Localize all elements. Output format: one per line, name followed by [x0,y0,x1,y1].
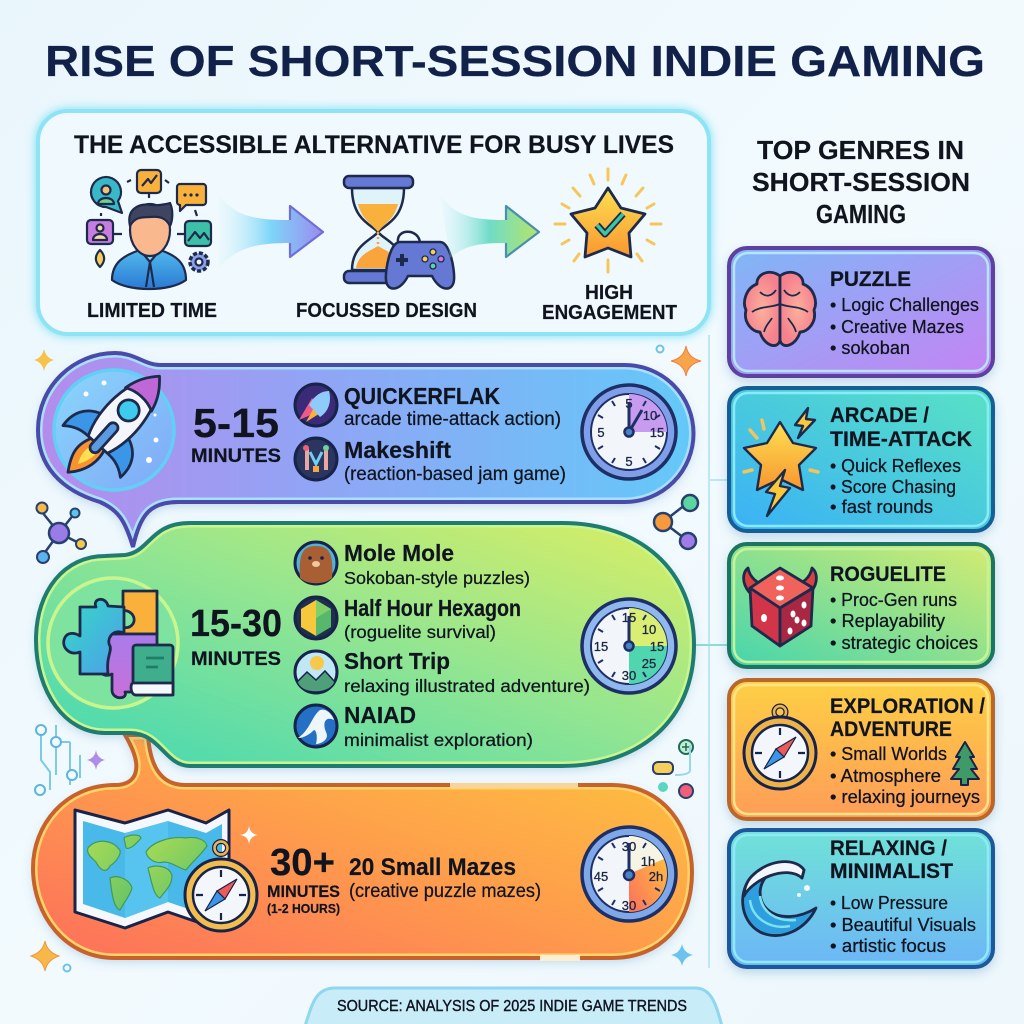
label: focussed design: FOCUSSED DESIGN [296,300,477,322]
icon: horned dice [744,568,816,646]
genre bullets: • Creative Mazes [830,317,964,337]
genre card: relaxing [729,830,993,967]
label: high engagement: ENGAGEMENT [542,302,677,324]
icon: puzzle and book [48,578,178,708]
game: Makeshift [344,437,566,485]
title: RISE OF SHORT-SESSION INDIE GAMING [45,37,985,86]
icon: compass [185,842,257,931]
game: Quickerflak: QUICKERFLAK [344,383,500,409]
icon: brain [744,272,816,346]
genres heading: SHORT-SESSION [752,167,970,197]
genre bullets: • Score Chasing [830,477,956,497]
game: Mole Mole [344,540,530,588]
genre heading [830,837,953,883]
panel heading: THE ACCESSIBLE ALTERNATIVE FOR BUSY LIVES [74,131,674,159]
genre heading [830,404,972,451]
duration: 30+ minutes: MINUTES [267,882,340,901]
panel: 5-15 minutes [38,350,694,547]
genre bullets: • fast rounds [830,497,933,517]
icon: pine tree [951,742,979,785]
genre heading: PUZZLE [830,268,911,291]
clock: 5-15 minutes: 5 [597,425,605,440]
icon: busy person [87,170,211,289]
genre heading: ARCADE / [830,404,929,427]
clock: 15-30 minutes: 25 [642,656,656,671]
genre bullets: • Small Worlds [830,744,947,764]
genre card: puzzle [729,248,993,376]
clock: 30+ minutes: 30 [622,839,636,854]
genre heading: MINIMALIST [830,860,953,883]
game: Short Trip [344,648,590,696]
icon: Quickerflak [295,384,337,426]
genre bullets: • Proc-Gen runs [830,590,957,610]
genre bullets: • artistic focus [830,936,946,956]
icon: Half Hour Hexagon [295,597,337,639]
clock: 30+ minutes: 1h [641,854,655,869]
genre bullets: • Logic Challenges [830,295,979,315]
clock: 15-30 minutes: 15 [650,639,664,654]
genre heading: EXPLORATION / [830,695,985,718]
panel: the accessible alternative [38,111,709,334]
genre heading [830,695,985,741]
genre heading: RELAXING / [830,837,947,860]
icon: star and lightning [744,408,818,516]
panel: 15-30 minutes [36,523,694,766]
duration: 15-30 minutes: 15-30 [190,603,282,645]
duration: 15-30 minutes [190,603,282,670]
clock: 15-30 minutes: 15 [594,639,608,654]
genre bullets: • Beautiful Visuals [830,915,976,935]
game: Makeshift: (reaction-based jam game) [344,464,566,485]
source tab [305,988,722,1024]
game: Quickerflak [344,383,561,430]
genre bullets [830,456,961,517]
genres heading: TOP GENRES IN [757,135,964,165]
duration: 30+ minutes: 30+ [270,842,335,884]
genre heading: TIME-ATTACK [830,428,972,451]
sparkle [240,826,258,844]
game: 20 Small Mazes [349,854,541,902]
genres heading [752,135,970,229]
clock: 5-15 minutes: 5 [625,454,633,469]
genre bullets: • strategic choices [830,633,978,653]
genre bullets [830,295,979,358]
genre heading: ADVENTURE [830,718,952,741]
genres heading: GAMING [816,199,906,229]
genre bullets: • relaxing journeys [830,787,980,807]
icon: compass [744,706,816,789]
duration: 15-30 minutes: MINUTES [191,649,281,670]
decorative sparkles and networks [31,346,701,972]
clock: 15-30 minutes: 30 [622,668,636,683]
game: NAIAD [344,702,533,750]
icon: star with check [555,169,661,272]
label: limited time: LIMITED TIME [87,300,217,322]
genre bullets [830,590,978,653]
game: NAIAD: minimalist exploration) [344,730,533,750]
icon: Mole Mole [295,542,337,584]
genre card: roguelite [729,544,993,667]
game: Short Trip: Short Trip [344,648,450,674]
game: Half Hour Hexagon: (roguelite survival) [344,622,496,642]
icon: Makeshift [295,438,337,480]
clock: 30+ minutes: 2h [649,869,663,884]
duration: 5-15 minutes: MINUTES [191,446,281,467]
game: Half Hour Hexagon: Half Hour Hexagon [344,595,521,621]
clock: 30+ minutes [582,827,676,921]
genre card: exploration [729,680,993,819]
duration: 5-15 minutes [191,400,281,467]
game: 20 Small Mazes: 20 Small Mazes [349,854,516,881]
duration: 30+ minutes [267,842,340,916]
icon: world map [75,810,229,928]
game: 20 Small Mazes: (creative puzzle mazes) [349,881,541,902]
genre card: arcade [729,388,993,531]
genre bullets: • Replayability [830,611,945,631]
genre heading: ROGUELITE [830,563,946,586]
source text: SOURCE: ANALYSIS OF 2025 INDIE GAME TRENDS [337,998,687,1015]
clock: 5-15 minutes: 15 [650,425,664,440]
clock: 15-30 minutes: 15 [622,610,636,625]
game: Half Hour Hexagon [344,595,521,642]
game: Short Trip: relaxing illustrated adventure) [344,676,590,696]
connector lines between timeline and genres [696,335,728,968]
game: Mole Mole: Sokoban-style puzzles) [344,568,530,588]
genre bullets [830,744,980,807]
clock: 15-30 minutes [582,599,676,693]
game: NAIAD: NAIAD [344,702,416,728]
duration: 5-15 minutes: 5-15 [193,400,279,446]
arrow: focussed design to high engagement [440,195,539,258]
panel: 30+ minutes [33,735,692,961]
arrow: limited time to focussed design [219,195,323,268]
genre bullets: • Quick Reflexes [830,456,961,476]
game: Makeshift: Makeshift [344,437,451,463]
icon: hourglass and controller [344,176,454,289]
icon: NAIAD [295,705,337,747]
game: Mole Mole: Mole Mole [344,540,454,566]
genre bullets: • Low Pressure [830,893,948,913]
icon: Short Trip [295,651,337,693]
clock: 5-15 minutes: 10 [643,408,657,423]
icon: wave [743,862,816,936]
genre bullets: • sokoban [830,338,910,358]
genre bullets: • Atmosphere [830,766,941,786]
clock: 15-30 minutes: 10 [642,622,656,637]
clock: 30+ minutes: 45 [594,869,608,884]
clock: 30+ minutes: 30 [622,898,636,913]
genre bullets [830,893,976,956]
clock: 5-15 minutes: 5 [625,396,633,411]
label: high engagement [542,282,677,324]
game: Quickerflak: arcade time-attack action) [344,409,561,430]
label: high engagement: HIGH [585,282,633,304]
icon: rocket [42,350,188,501]
duration: 30+ minutes: (1-2 HOURS) [267,902,340,916]
clock: 5-15 minutes [582,385,676,479]
